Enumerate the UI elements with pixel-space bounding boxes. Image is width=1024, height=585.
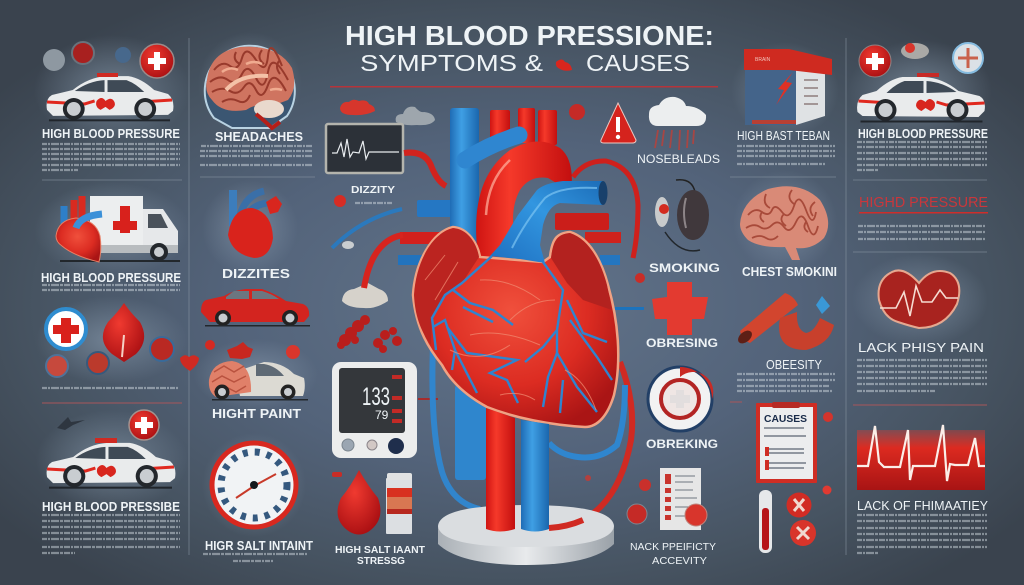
panel: brain car high paint <box>194 339 318 421</box>
icon: cloud with rain <box>649 97 706 150</box>
heart body <box>413 227 618 427</box>
icon: truck <box>60 196 180 262</box>
heading: ACCEVITY <box>652 555 707 567</box>
right tube <box>573 161 638 258</box>
icon: ECG monitor <box>326 124 403 173</box>
text block <box>42 144 180 170</box>
panel: center right symptoms <box>569 97 720 567</box>
text block <box>42 515 180 553</box>
heading: STRESSG <box>357 555 405 567</box>
small red mark <box>585 475 591 481</box>
panel: ECG <box>857 425 988 553</box>
ambulance car <box>47 443 175 489</box>
heading: HIGH SALT IAANT <box>335 544 426 556</box>
pedestal base <box>438 526 614 565</box>
aortic arch <box>476 141 572 258</box>
text block <box>42 387 178 389</box>
icon: test tube <box>759 490 772 553</box>
icon: blood pressure monitor: 133 <box>362 383 390 411</box>
icon: red cross <box>652 282 708 335</box>
text block <box>857 142 987 170</box>
heading: OBEESITY <box>766 357 822 372</box>
icon: heart with ECG <box>879 270 959 328</box>
chart: ECG strip <box>857 425 985 490</box>
light capillaries <box>425 255 596 410</box>
icon: pressure gauge <box>212 443 296 527</box>
panel: obesity <box>736 293 835 391</box>
panel: heart dizzites <box>202 180 298 281</box>
panel: column five top car <box>848 40 992 170</box>
icon: blue badge <box>115 47 131 63</box>
right tube lower <box>548 362 632 528</box>
blue support column <box>521 420 549 532</box>
icon: red dot <box>569 104 585 120</box>
panel: heart truck <box>34 182 190 290</box>
pulmonary artery <box>490 181 603 263</box>
icon: cloud spot <box>901 43 929 59</box>
icon: red car <box>201 289 310 326</box>
icon: blue cross badge <box>46 309 86 349</box>
panel: bottom car <box>36 410 188 553</box>
ambulance car <box>857 77 985 122</box>
right blue tube <box>549 385 625 458</box>
heading: CHEST SMOKINI <box>742 264 837 279</box>
panel: causes clipboard <box>756 402 833 553</box>
icon: blue ring cross <box>953 43 983 73</box>
back column <box>455 385 486 480</box>
heading: LACK OF FHIMAATIEY <box>857 498 988 513</box>
icon: product box: BRAIN <box>755 57 771 63</box>
left tube <box>364 235 403 288</box>
heading: DIZZITES <box>222 266 290 281</box>
ambulance car <box>47 76 173 121</box>
icon: blood drop <box>338 470 380 534</box>
chart: central heart illustration <box>364 108 644 565</box>
heading: HIGH BLOOD PRESSURE <box>41 270 181 285</box>
text block <box>858 226 985 239</box>
icon: red dots <box>205 340 300 359</box>
panel: column one, top car <box>34 35 190 170</box>
icon: berries <box>337 315 402 353</box>
icon: warning triangle <box>601 103 636 143</box>
right auricle <box>551 233 612 310</box>
title: HIGH BLOOD PRESSIONE: <box>345 20 714 51</box>
icon: anatomical heart <box>56 196 102 262</box>
icon: x badges <box>786 492 816 546</box>
red heart marker <box>180 355 199 371</box>
panel: brain headaches <box>198 32 312 165</box>
pedestal top <box>438 505 614 547</box>
blue branch <box>465 135 519 160</box>
icon: red cross <box>859 45 891 77</box>
title: CAUSES <box>586 50 690 76</box>
text block <box>737 146 835 164</box>
decorative red blob <box>340 100 375 115</box>
icon: pill bottle <box>386 473 412 534</box>
panel: heart pain <box>852 254 988 391</box>
icon: red badge <box>72 42 94 64</box>
panel: blood drop and cross <box>36 296 199 388</box>
heading: HIGH BLOOD PRESSURE <box>858 126 988 141</box>
icon: blood pressure monitor <box>332 362 417 458</box>
tube on base <box>549 520 583 528</box>
panel: brain chest smoking <box>733 170 837 279</box>
side stubs <box>398 200 644 310</box>
heading: SHEADACHES <box>215 129 303 144</box>
superior vena cava <box>450 108 479 248</box>
icon: document <box>660 468 701 530</box>
panel: gauge <box>202 433 313 561</box>
icon: red cross <box>129 410 159 440</box>
text block <box>737 374 835 391</box>
red rule <box>859 212 988 214</box>
left auricle <box>414 228 479 345</box>
heading: DIZZITY <box>351 184 395 196</box>
icon: red dot <box>334 195 346 207</box>
icon: grey badge <box>43 49 65 71</box>
icon: small circles <box>46 337 174 377</box>
heading: HIGH BLOOD PRESSURE <box>42 126 180 141</box>
title: SYMPTOMS & <box>360 50 543 76</box>
icon: red dot <box>635 273 645 283</box>
panel: center left symptoms <box>326 100 446 567</box>
red support column <box>486 408 515 532</box>
icon: red dots <box>627 479 707 526</box>
red connector <box>418 398 438 400</box>
heading: HIGHD PRESSURE <box>859 194 988 211</box>
heading: NOSEBLEADS <box>637 154 720 166</box>
coronary veins <box>432 256 612 413</box>
heading: OBREKING <box>646 439 718 451</box>
icon: sphygmomanometer bulb <box>655 180 709 251</box>
thin blue tube <box>432 345 480 509</box>
icon: car with brain <box>209 361 308 400</box>
icon: brain <box>740 186 828 260</box>
icon: cloud <box>396 107 435 125</box>
icon: siren <box>57 417 85 430</box>
icon: clipboard <box>756 402 817 483</box>
icon: round ring badge <box>648 367 713 431</box>
heading: LACK PHISY PAIN <box>858 340 984 355</box>
heading: CAUSES <box>764 413 807 425</box>
aorta stubs <box>490 108 557 145</box>
title <box>330 20 718 88</box>
heading: HIGH BLOOD PRESSIBE <box>42 499 180 514</box>
icon: blood pressure monitor: 79 <box>375 408 389 422</box>
panel: box high salt <box>731 42 839 164</box>
red connector <box>404 153 446 186</box>
heading: SMOKING <box>649 263 720 275</box>
text block <box>203 554 308 561</box>
icon: blue tube <box>332 209 402 249</box>
icon: brain in circle <box>205 46 295 128</box>
heading: HIGH BAST TEBAN <box>737 128 830 143</box>
text block <box>42 285 180 290</box>
text block <box>857 515 987 553</box>
small red mark <box>332 472 342 477</box>
icon: blood drop <box>103 303 144 362</box>
icon: heart <box>228 190 282 258</box>
panel: high pressure red <box>858 194 988 239</box>
icon: cloud base <box>342 283 388 308</box>
heading: NACK PPEIFICTY <box>630 541 716 553</box>
icon: artery tube <box>736 293 834 350</box>
heading: OBRESING <box>646 338 718 350</box>
icon: red cross <box>140 44 174 78</box>
text block <box>200 146 312 165</box>
text block <box>857 360 987 391</box>
faint text block <box>355 202 392 204</box>
icon: red pins <box>822 412 833 494</box>
heading: HIGR SALT INTAINT <box>205 538 313 553</box>
heading: HIGHT PAINT <box>212 406 301 421</box>
